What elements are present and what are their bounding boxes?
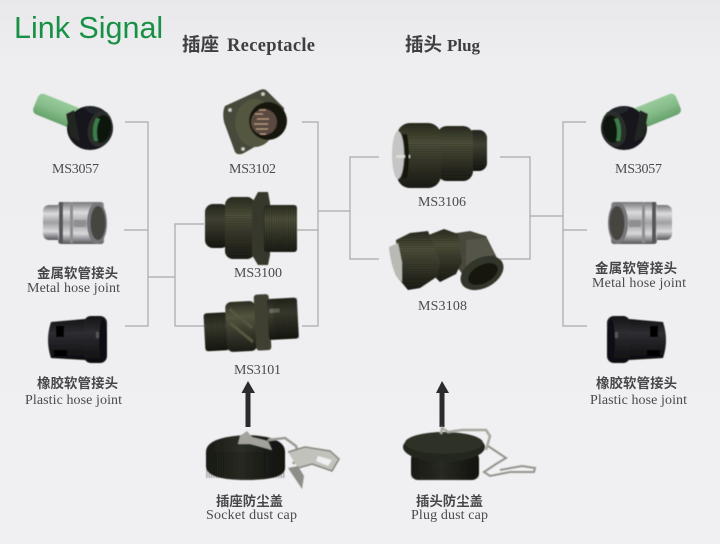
- icon: MS3102 square flange receptacle: [223, 89, 287, 154]
- icon: metal hose joint right: [608, 202, 672, 244]
- heading: Receptacle: 插座: [182, 36, 219, 56]
- title: Link Signal: Link Signal: [14, 11, 163, 45]
- icon: plastic hose joint right: [607, 316, 666, 363]
- label: metal hose joint right: Metal hose joint: [592, 276, 686, 291]
- right column: hose joints: [590, 92, 687, 408]
- label: plug dust cap: 插头防尘盖: [416, 493, 483, 509]
- label: metal hose joint right: [592, 260, 686, 291]
- icon: MS3106 plug: [392, 123, 487, 188]
- label: plastic hose joint right: Plastic hose joint: [590, 393, 687, 408]
- arrow: socket cap to MS3101: [242, 381, 255, 427]
- label: plug dust cap: [411, 493, 488, 523]
- label: metal hose joint right: 金属软管接头: [595, 260, 677, 276]
- label: plastic hose joint right: 橡胶软管接头: [596, 375, 677, 391]
- label: plastic hose joint right: [590, 375, 687, 408]
- label: metal hose joint left: [27, 265, 120, 296]
- label: plug dust cap: Plug dust cap: [411, 508, 488, 523]
- heading: Plug: Plug: [447, 36, 481, 55]
- label: plastic hose joint left: [25, 375, 122, 408]
- icon: MS3108 elbow plug: [389, 229, 509, 297]
- plug dust cap: [403, 428, 535, 523]
- label: plastic hose joint left: 橡胶软管接头: [37, 375, 118, 391]
- icon: MS3101 receptacle: [203, 293, 299, 353]
- icon: MS3057 right: [599, 92, 682, 150]
- label: metal hose joint left: 金属软管接头: [37, 265, 118, 281]
- left column: hose joints: [25, 92, 122, 408]
- icon: MS3057 left: [32, 92, 115, 150]
- label: plastic hose joint left: Plastic hose joint: [25, 393, 122, 408]
- label: MS3106: MS3106: [418, 195, 466, 210]
- socket dust cap: [206, 431, 339, 523]
- connector lines: [124, 122, 587, 326]
- label: socket dust cap: Socket dust cap: [206, 508, 297, 523]
- icon: MS3100 receptacle: [205, 192, 297, 265]
- label: MS3057 right: MS3057: [615, 162, 662, 177]
- plug column: [389, 123, 509, 314]
- icon: plug dust cap: [403, 428, 535, 480]
- icon: plastic hose joint left: [48, 316, 107, 363]
- label: MS3101: MS3101: [234, 363, 281, 378]
- label: MS3057 left: MS3057: [52, 162, 99, 177]
- label: socket dust cap: [206, 493, 297, 523]
- label: socket dust cap: 插座防尘盖: [216, 493, 283, 509]
- arrow: plug cap to plug: [436, 381, 449, 427]
- heading: Receptacle: Receptacle: [227, 36, 315, 56]
- heading: Plug: 插头: [405, 36, 442, 56]
- icon: metal hose joint left: [43, 202, 107, 244]
- label: MS3102: MS3102: [229, 162, 276, 177]
- label: MS3100: MS3100: [234, 266, 282, 281]
- label: MS3108: MS3108: [418, 299, 467, 314]
- icon: socket dust cap: [206, 431, 339, 489]
- label: metal hose joint left: Metal hose joint: [27, 281, 120, 296]
- receptacle column: [203, 89, 299, 378]
